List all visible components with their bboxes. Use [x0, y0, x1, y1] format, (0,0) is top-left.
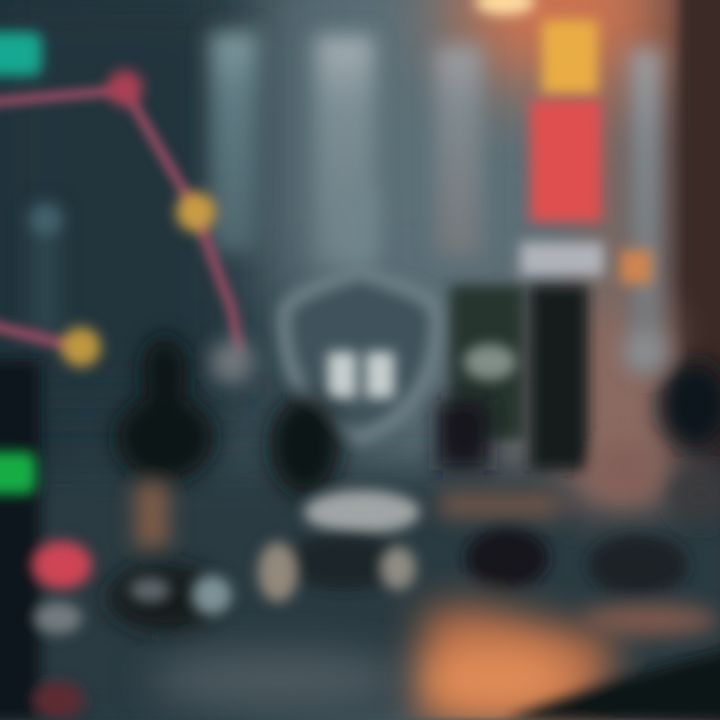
- dark panels right of shield: [436, 285, 588, 470]
- light: green: [0, 452, 36, 494]
- desk item: left group: [135, 482, 169, 548]
- shield outline: [284, 272, 437, 438]
- marker: red: [107, 70, 143, 106]
- line chart: [0, 32, 254, 384]
- dark foreground corner: [505, 645, 720, 720]
- silhouette figures: [115, 332, 720, 495]
- figures and desk items: [107, 440, 720, 632]
- panel: black: [530, 285, 588, 470]
- shield icon with open book: [284, 190, 437, 438]
- left dark column with status lights: [0, 360, 92, 720]
- chart line: upper: [0, 90, 240, 355]
- background columns: [32, 32, 662, 368]
- panel: lower shadow: [436, 400, 490, 470]
- stem: [340, 190, 376, 260]
- panel: green tinted: [450, 285, 524, 440]
- desk item: centre group: [304, 490, 420, 534]
- light: white: [34, 602, 82, 634]
- marker: yellow: [61, 327, 101, 367]
- chart line: lower: [0, 320, 80, 348]
- marker: grey: [30, 204, 62, 236]
- light: dark red: [32, 682, 84, 718]
- light: red: [32, 541, 92, 589]
- marker: pale: [210, 340, 254, 384]
- desk item: right group: [440, 492, 560, 518]
- table surface with orange glow: [150, 604, 720, 720]
- marker: amber: [176, 192, 216, 232]
- bright bar: red, yellow and white stack: [475, 0, 652, 284]
- marker: teal: [0, 32, 42, 76]
- open book: [328, 352, 394, 398]
